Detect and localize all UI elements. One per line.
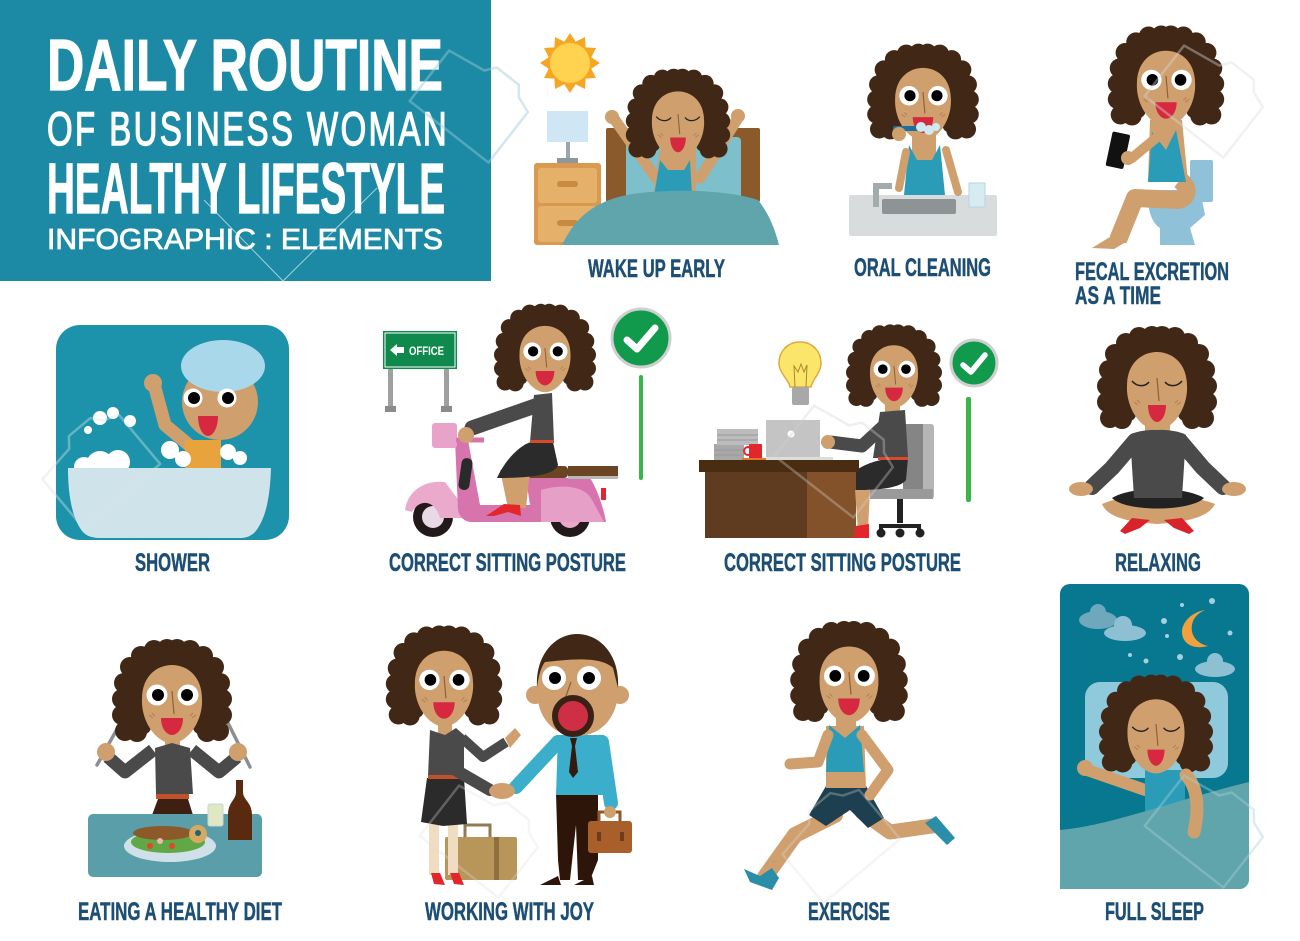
table [88, 814, 262, 877]
wine bottle [228, 780, 252, 840]
label: correct sitting posture desk: CORRECT SITTING POSTURE [724, 549, 961, 577]
woman at desk [821, 324, 942, 490]
businesswoman [386, 626, 521, 885]
paper stacks [714, 429, 758, 460]
illustration: wake up early [534, 33, 779, 245]
glass [208, 804, 223, 826]
illustration: working with joy [386, 626, 632, 885]
shorts [809, 786, 884, 828]
torso and arms [1069, 420, 1246, 498]
briefcase [588, 806, 632, 853]
title: healthy lifestyle: HEALTHY LIFESTYLE [47, 150, 445, 229]
office sign: OFFICE [409, 344, 444, 358]
sleeping woman [1077, 675, 1213, 815]
knife and fork [97, 713, 250, 767]
pillow [1085, 682, 1228, 778]
woman seated with phone [1092, 26, 1224, 249]
woman riding [458, 304, 596, 516]
arm over blanket [1186, 775, 1197, 832]
blanket [1060, 782, 1249, 889]
clouds [1079, 604, 1235, 677]
blanket [562, 191, 779, 245]
bathtub [68, 468, 271, 538]
label: correct sitting posture scooter: CORRECT SITTING POSTURE [389, 549, 626, 577]
label: fecal excretion as a time [1075, 258, 1229, 310]
head [1097, 326, 1217, 430]
icon: sun [540, 33, 600, 93]
illustration: exercise [744, 621, 955, 890]
businessman [516, 634, 629, 885]
label: exercise: EXERCISE [808, 898, 890, 926]
toilet [1148, 160, 1213, 245]
suitcase [445, 825, 517, 880]
label: fecal excretion as a time: AS A TIME [1075, 282, 1161, 310]
illustration: relaxing [1069, 326, 1246, 534]
illustration: desk work [699, 324, 997, 538]
desk [699, 460, 859, 538]
label: wake up early: WAKE UP EARLY [588, 255, 725, 283]
check badge [951, 340, 997, 502]
label: shower: SHOWER [135, 549, 210, 577]
illustration: eating a healthy diet [88, 639, 262, 877]
office chair [870, 424, 934, 538]
icon: lamp [547, 111, 588, 163]
label: working with joy: WORKING WITH JOY [425, 898, 594, 926]
woman stretching [605, 69, 745, 196]
light bulb [779, 342, 821, 405]
illustration: shower [56, 325, 289, 540]
head [790, 621, 908, 723]
scooter [405, 423, 618, 537]
subtitle: infographic elements: INFOGRAPHIC : ELEMENTS [47, 224, 443, 256]
illustration: oral cleaning [849, 44, 997, 236]
woman eating [97, 639, 247, 815]
label: full sleep: FULL SLEEP [1105, 898, 1204, 926]
check badge [612, 309, 670, 480]
woman brushing teeth [867, 44, 979, 195]
red mug [742, 444, 766, 460]
illustration: fecal excretion [1092, 26, 1224, 249]
title panel [0, 0, 491, 281]
foam bubbles [74, 407, 247, 479]
plate with fish [124, 825, 216, 862]
title: daily routine: DAILY ROUTINE [47, 26, 443, 106]
laptop [766, 420, 833, 460]
woman in bath [144, 340, 265, 470]
arms [790, 735, 888, 795]
label: relaxing: RELAXING [1115, 549, 1201, 577]
subtitle: of business woman: OF BUSINESS WOMAN [47, 102, 447, 155]
bed headboard and pillow [606, 128, 760, 202]
nightstand [534, 163, 601, 245]
label: eating a healthy diet: EATING A HEALTHY DIET [78, 898, 282, 926]
leg and shoe [853, 490, 870, 538]
office sign [383, 331, 457, 412]
moon [1182, 610, 1208, 647]
sink [849, 183, 997, 236]
handshake [489, 783, 515, 799]
stars [1128, 598, 1232, 664]
illustration: scooter commute [383, 304, 670, 537]
label: oral cleaning: ORAL CLEANING [854, 254, 991, 282]
crossed legs [1102, 489, 1215, 534]
illustration: night sleep [1060, 584, 1249, 889]
torso [826, 712, 866, 788]
legs [744, 812, 955, 890]
